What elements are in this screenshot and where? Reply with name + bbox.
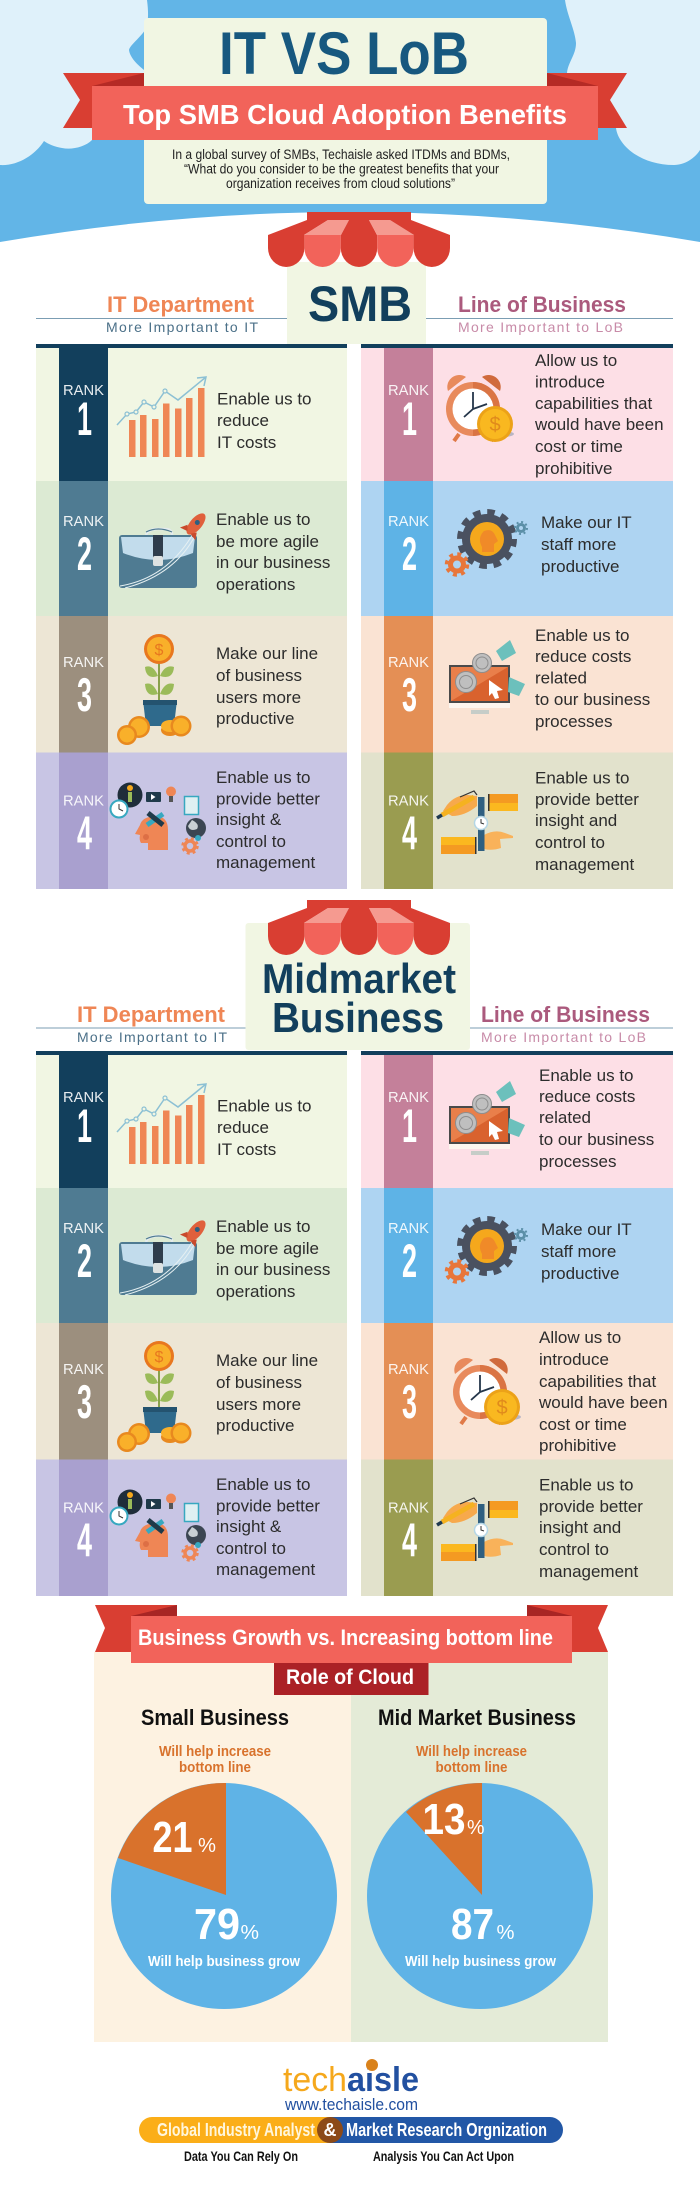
pie: % (467, 1817, 485, 1839)
rank 3 row: 3 (77, 1375, 92, 1428)
column header: IT Department (36, 292, 287, 335)
panel: small business background (94, 1652, 351, 2042)
rank 4 row: Enable us to (216, 1475, 311, 1494)
rank 3 row: to our business (535, 690, 650, 709)
column header: Line of Business: More Important to LoB (458, 319, 623, 335)
mid market chart (367, 1705, 593, 2009)
orange label (416, 1744, 527, 1776)
pie (367, 1783, 593, 2009)
rank 2 row: 2 (77, 527, 92, 580)
rank 1 row: processes (539, 1152, 616, 1171)
rank 1 row: RANK (63, 382, 104, 399)
rank 4 row: 4 (402, 1513, 417, 1566)
rank 4 row: 4 (77, 1513, 92, 1566)
rank 2 row: RANK (388, 513, 429, 530)
pie (111, 1783, 337, 2009)
small business chart (111, 1705, 337, 2009)
rank 2 row: Make our IT (541, 513, 632, 532)
survey question: In a global survey of SMBs, Techaisle asked ITDMs and BDMs, (172, 147, 510, 162)
role of cloud label: Role of Cloud (286, 1666, 414, 1689)
ribbon: Top SMB Cloud Adoption Benefits (123, 99, 567, 130)
rank 4 row: control to (539, 1540, 609, 1559)
rank 3 row: would have been (538, 1393, 668, 1412)
pie: 13 (422, 1795, 466, 1844)
rank 1 row: RANK (63, 1089, 104, 1106)
column header: Line of Business (426, 292, 673, 335)
rank 4 row (361, 1460, 673, 1596)
rank 3 row: RANK (63, 1361, 104, 1378)
growth ribbon (95, 1605, 608, 1663)
panel: SMB line of business ranks (361, 344, 673, 889)
rank 1 row: 1 (402, 1099, 417, 1152)
rank 1 row: introduce (535, 372, 605, 392)
rank 1 row (361, 1055, 673, 1188)
rank 3 row: introduce (539, 1350, 609, 1369)
heading: Mid Market Business (378, 1705, 576, 1730)
footer logo (283, 2059, 419, 2114)
rank 2 row: Make our IT (541, 1220, 632, 1239)
rank 3 row (361, 616, 673, 752)
pie: Will help business grow (148, 1954, 301, 1970)
rank 1 row: IT costs (217, 1140, 276, 1159)
role of cloud label (274, 1663, 428, 1695)
rank 3 row: users more (216, 688, 301, 707)
rank 3 row: users more (216, 1395, 301, 1414)
rank 4 row: insight & (216, 1517, 282, 1536)
survey question: “What do you consider to be the greatest benefits that your (184, 162, 499, 176)
rank 4 row: 4 (402, 806, 417, 859)
rank 3 row: productive (216, 709, 294, 728)
rank 1 row (36, 1055, 347, 1188)
rank 2 row: operations (216, 575, 295, 594)
rank 4 row: RANK (63, 792, 104, 810)
pie: % (496, 1922, 515, 1944)
panel: Midmarket IT department ranks (36, 1051, 347, 1596)
column header: IT Department (36, 1002, 246, 1045)
rank 4 row (361, 752, 673, 889)
rank 4 row: 4 (77, 806, 92, 859)
orange label: bottom line (436, 1760, 508, 1776)
rank 4 row: control to (216, 1539, 286, 1558)
rank 1 row: reduce costs (539, 1087, 635, 1106)
rank 2 row: 2 (402, 1234, 417, 1287)
rank 1 row: to our business (539, 1130, 654, 1149)
rank 1 row: 1 (402, 392, 417, 445)
column header: IT Department: IT Department (107, 292, 255, 317)
footer pill: & (324, 2120, 336, 2140)
rank 4 row: provide better (216, 1496, 320, 1516)
rank 1 row: 1 (77, 392, 92, 445)
rank 3 row (36, 616, 347, 752)
rank 4 row: provide better (535, 790, 639, 809)
rank 3 row: of business (216, 666, 302, 685)
rank 1 row (361, 348, 673, 481)
orange label (159, 1744, 271, 1776)
rank 3 row: cost or time (539, 1415, 627, 1434)
orange label: Will help increase (159, 1744, 271, 1760)
rank 4 row: RANK (388, 792, 429, 810)
column header: Line of Business: Line of Business (458, 292, 626, 317)
rank 3 row: 3 (402, 668, 417, 721)
rank 1 row: prohibitive (535, 459, 612, 478)
survey question: organization receives from cloud solutions” (226, 176, 455, 191)
rank 4 row: management (539, 1562, 639, 1581)
section heading: SMB (268, 212, 450, 344)
growth ribbon: Business Growth vs. Increasing bottom line (138, 1625, 553, 1650)
rank 1 row: reduce (217, 1118, 269, 1137)
pie: Will help business grow (405, 1954, 557, 1970)
rank 3 row: of business (216, 1373, 302, 1392)
rank 3 row: reduce costs (535, 647, 631, 666)
rank 4 row: provide better (539, 1497, 643, 1516)
pie: 87 (451, 1900, 494, 1949)
rank 1 row: Enable us to (217, 1096, 312, 1116)
rank 3 row: 3 (77, 668, 92, 721)
rank 1 row: would have been (534, 415, 664, 434)
rank 1 row: reduce (217, 411, 269, 430)
footer pill: Market Research Orgnization (346, 2119, 547, 2140)
rank 2 row: operations (216, 1282, 295, 1301)
rank 3 row: productive (216, 1416, 294, 1435)
rank 1 row (36, 348, 347, 481)
rank 2 row: RANK (388, 1220, 429, 1237)
footer logo: aisle (347, 2061, 419, 2099)
rank 3 row: Enable us to (535, 626, 630, 645)
column header: Line of Business: Line of Business (481, 1002, 650, 1027)
tagline left: Data You Can Rely On (184, 2148, 298, 2164)
rank 4 row: control to (216, 832, 286, 851)
rank 3 row: processes (535, 712, 612, 731)
rank 3 row: prohibitive (539, 1436, 616, 1455)
cloud right (565, 0, 700, 165)
survey question (172, 147, 510, 191)
panel: mid market background (351, 1652, 608, 2042)
rank 3 row: RANK (388, 1361, 429, 1378)
rank 1 row: RANK (388, 382, 429, 399)
rank 1 row: Enable us to (217, 390, 312, 408)
rank 2 row: productive (541, 1264, 619, 1283)
pie: % (240, 1922, 259, 1944)
rank 3 row: Allow us to (539, 1328, 621, 1347)
rank 3 row: capabilities that (539, 1372, 656, 1391)
rank 4 row: insight and (535, 811, 617, 830)
rank 2 row: staff more (541, 1242, 616, 1261)
rank 4 row: management (216, 1560, 316, 1579)
rank 2 row: be more agile (216, 1239, 319, 1258)
rank 2 row (36, 1188, 347, 1323)
column header: Line of Business: More Important to LoB (481, 1029, 646, 1045)
rank 1 row: capabilities that (535, 394, 652, 413)
rank 4 row: control to (535, 833, 605, 852)
sky background (0, 0, 700, 242)
rank 2 row: Enable us to (216, 510, 311, 529)
rank 4 row: provide better (216, 790, 320, 808)
rank 3 row: Make our line (216, 1351, 318, 1370)
column header: IT Department: More Important to IT (106, 319, 258, 335)
column header: IT Department: IT Department (77, 1002, 226, 1027)
header card (63, 18, 627, 204)
pie: 79 (194, 1900, 240, 1949)
rank 1 row: IT costs (217, 433, 276, 452)
rank 4 row: Enable us to (539, 1476, 634, 1494)
rank 4 row: insight & (216, 810, 282, 829)
column header: IT Department: More Important to IT (77, 1029, 227, 1045)
rank 2 row: in our business (216, 1260, 330, 1279)
rank 3 row: related (535, 668, 587, 688)
rank 2 row (36, 481, 347, 616)
rank 1 row: Allow us to (535, 351, 617, 370)
rank 1 row: RANK (388, 1089, 429, 1106)
orange label: Will help increase (416, 1744, 527, 1760)
footer pill: Global Industry Analyst (157, 2119, 315, 2140)
rank 3 row (36, 1323, 347, 1460)
tagline right: Analysis You Can Act Upon (373, 2148, 514, 2164)
footer logo: www.techaisle.com (284, 2095, 418, 2114)
rank 2 row (361, 1188, 673, 1323)
panel: SMB IT department ranks (36, 344, 347, 889)
rank 4 row: management (216, 853, 316, 872)
rank 1 row: cost or time (535, 437, 623, 456)
rank 2 row: RANK (63, 513, 104, 530)
rank 2 row: productive (541, 557, 619, 576)
section heading: Midmarket Business (246, 900, 470, 1050)
rank 4 row (36, 1460, 347, 1596)
heading: Small Business (141, 1705, 289, 1730)
rank 4 row: Enable us to (216, 768, 311, 787)
column header: Line of Business (470, 1002, 673, 1045)
title: IT VS LoB (219, 20, 469, 87)
rank 4 row (36, 752, 347, 889)
rank 4 row: RANK (63, 1500, 104, 1516)
rank 3 row (361, 1323, 673, 1460)
rank 4 row: management (535, 855, 635, 874)
footer logo: tech (283, 2061, 347, 2099)
rank 3 row: RANK (388, 654, 429, 671)
pie: 21 (152, 1813, 192, 1862)
cloud left (0, 0, 148, 165)
rank 2 row (361, 481, 673, 616)
rank 2 row: 2 (77, 1234, 92, 1287)
rank 1 row: related (539, 1108, 591, 1127)
footer pill (139, 2117, 563, 2143)
section heading: SMB: SMB (308, 276, 412, 332)
rank 3 row: 3 (402, 1375, 417, 1428)
rank 1 row: Enable us to (539, 1066, 634, 1085)
rank 4 row: insight and (539, 1518, 621, 1537)
rank 2 row: in our business (216, 553, 330, 572)
rank 2 row: staff more (541, 535, 616, 554)
section heading: Midmarket Business: Midmarket (262, 955, 456, 1002)
rank 3 row: Make our line (216, 644, 318, 663)
rank 1 row: 1 (77, 1099, 92, 1152)
ribbon (63, 73, 627, 140)
rank 2 row: Enable us to (216, 1217, 311, 1236)
section heading: Midmarket Business: Business (272, 994, 444, 1041)
rank 2 row: 2 (402, 527, 417, 580)
panel: Midmarket line of business ranks (361, 1051, 673, 1596)
rank 3 row: RANK (63, 654, 104, 671)
pie: % (198, 1835, 216, 1857)
rank 4 row: Enable us to (535, 768, 630, 788)
rank 2 row: RANK (63, 1220, 104, 1237)
rank 2 row: be more agile (216, 532, 319, 551)
orange label: bottom line (179, 1760, 251, 1776)
rank 4 row: RANK (388, 1500, 429, 1516)
